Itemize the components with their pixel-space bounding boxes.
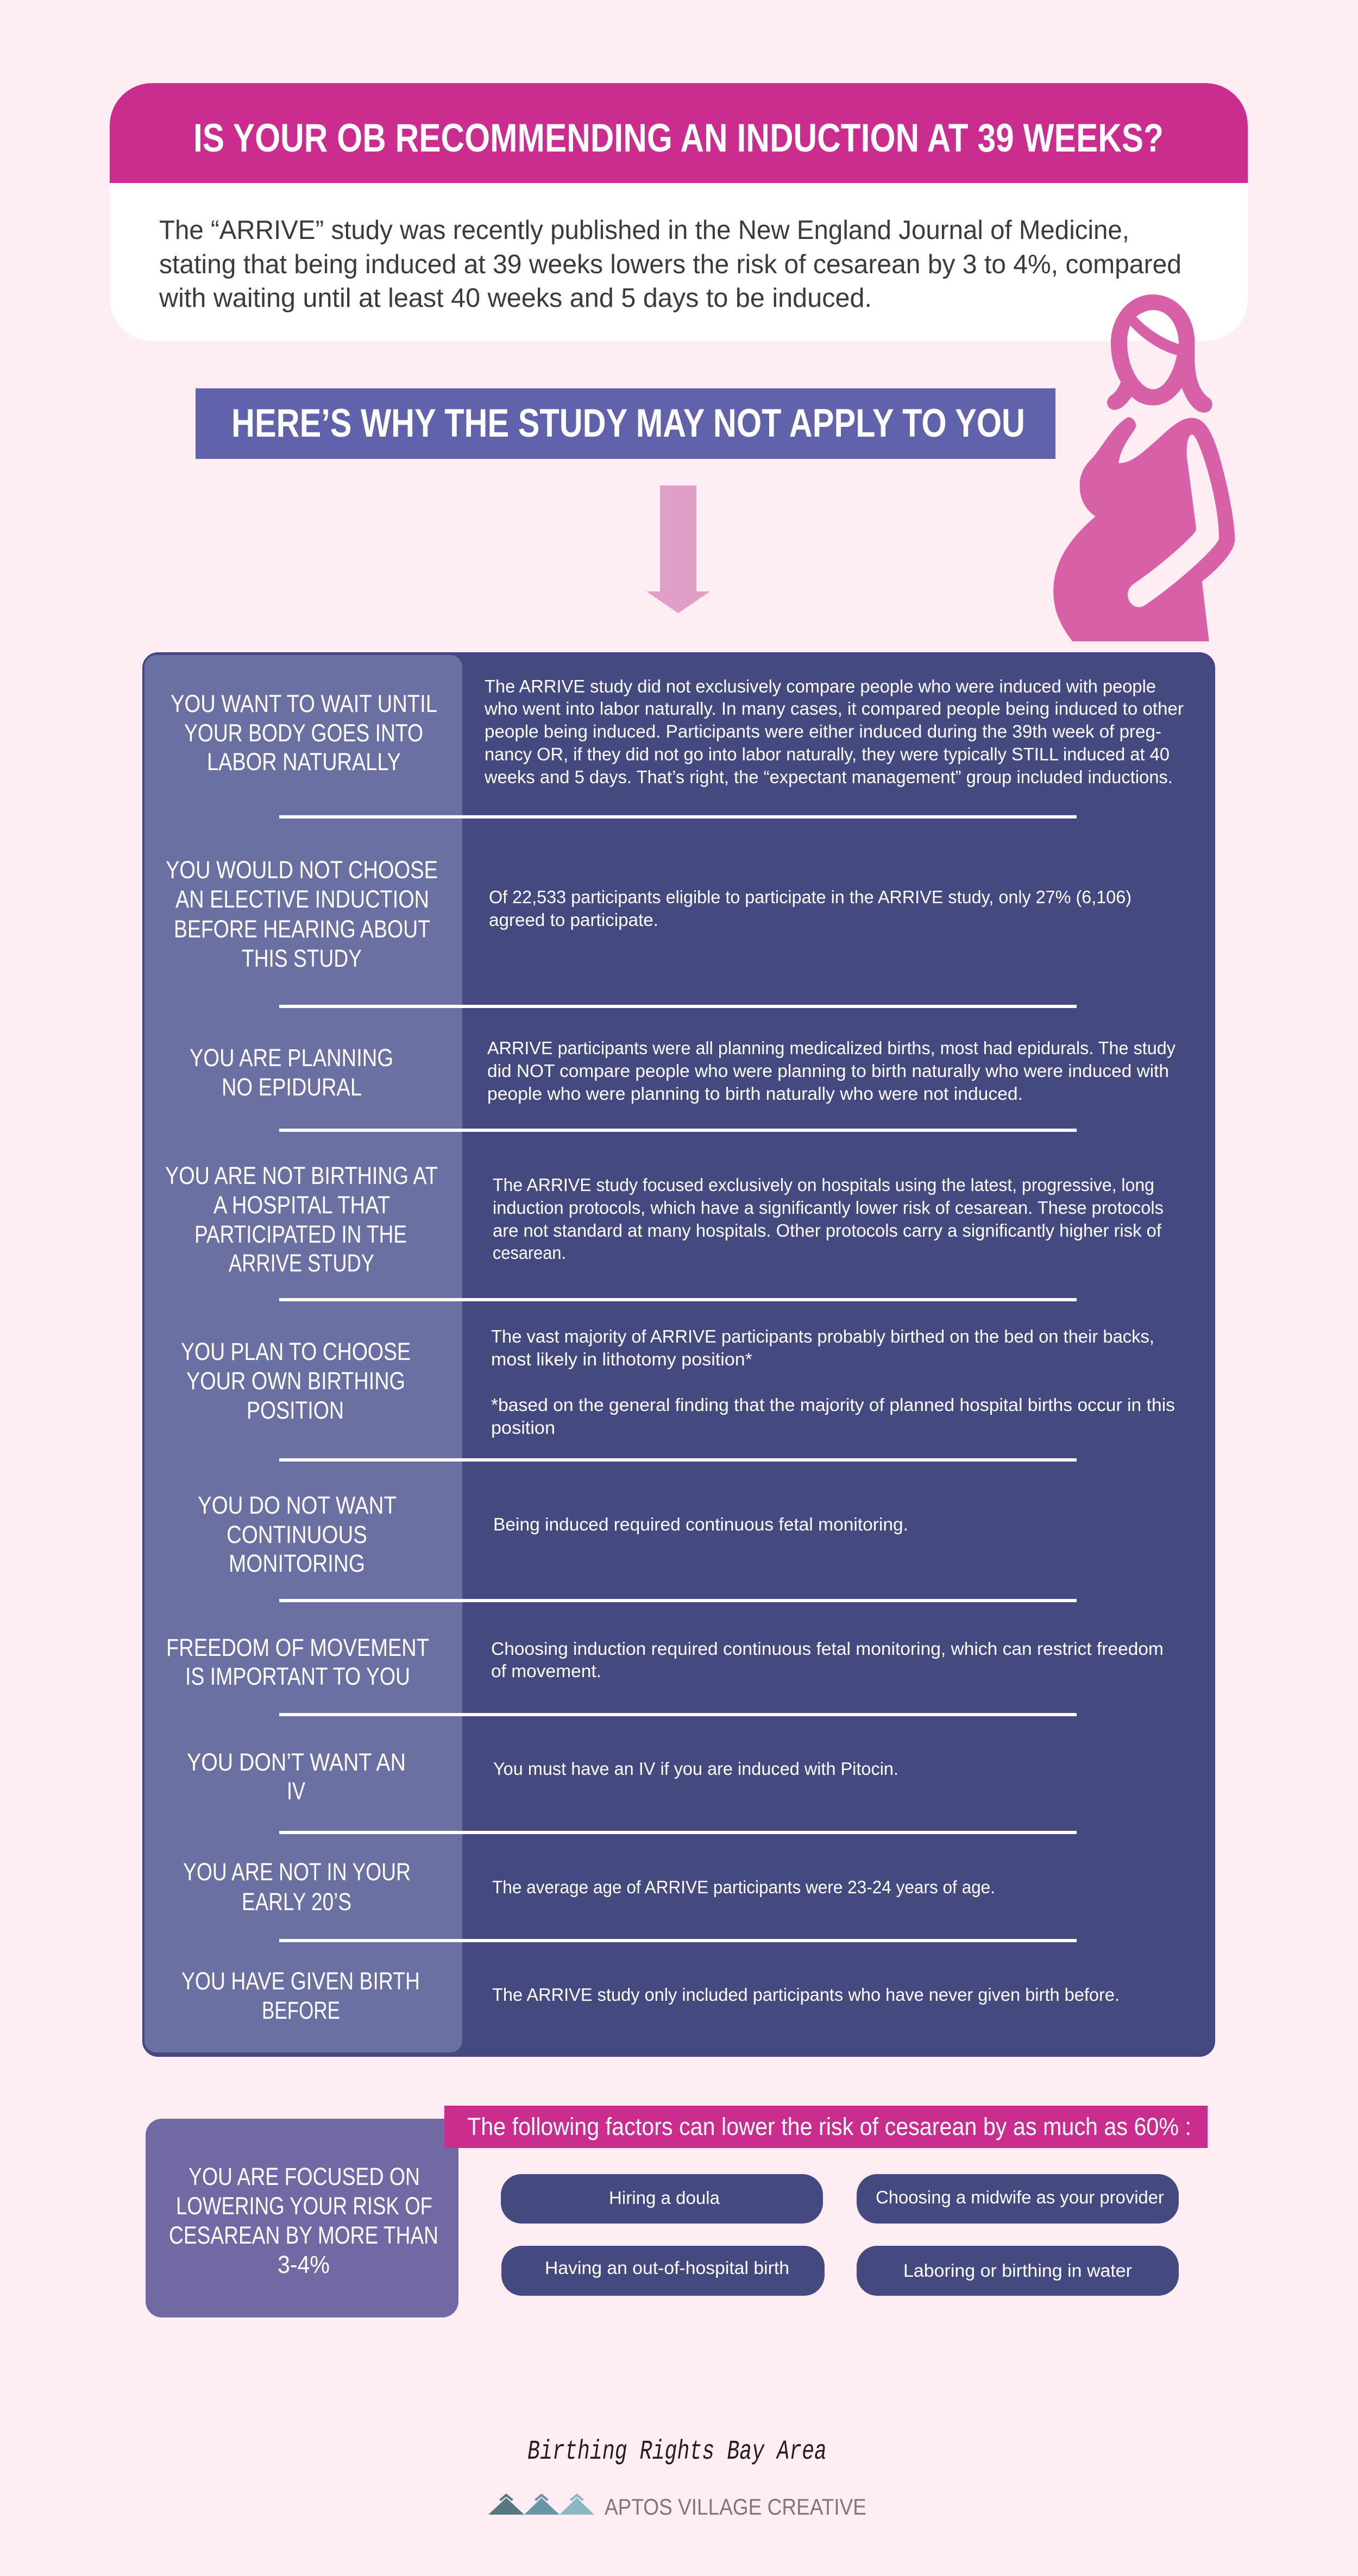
row label: IS IMPORTANT TO YOU	[185, 1662, 410, 1690]
panel: reasons table	[143, 653, 1215, 2056]
row text: most likely in lithotomy position*	[491, 1350, 752, 1370]
logo: Aptos Village Creative	[488, 2493, 866, 2520]
card background	[110, 83, 1248, 341]
pill: doula: Hiring a doula	[609, 2188, 720, 2208]
icon: pregnant woman	[1053, 294, 1235, 641]
pill: out-of-hospital birth: Having an out-of-hospital birth	[545, 2258, 789, 2278]
row text: You must have an IV if you are induced with Pitocin.	[493, 1759, 898, 1779]
row label: A HOSPITAL THAT	[213, 1191, 390, 1219]
row label	[165, 1162, 438, 1277]
row: participating hospital	[165, 1162, 1164, 1277]
row: no epidural	[190, 1038, 1175, 1104]
row text: nancy OR, if they did not go into labor naturally, they were typically STILL induced at 40	[485, 745, 1170, 765]
card: focused on lowering risk	[146, 2119, 458, 2317]
title band	[110, 83, 1248, 183]
card: focused on lowering risk: 3-4%	[278, 2251, 330, 2278]
icon: three trees	[488, 2493, 594, 2515]
row text: Choosing induction required continuous fetal monitoring, which can restrict freedom	[491, 1639, 1164, 1659]
row text: induction protocols, which have a significantly lower risk of cesarean. These protocols	[493, 1198, 1164, 1218]
row text: The average age of ARRIVE participants were 23-24 years of age.	[492, 1878, 995, 1898]
row label: YOU WOULD NOT CHOOSE	[166, 856, 438, 884]
row text	[489, 887, 1131, 930]
row text: are not standard at many hospitals. Other protocols carry a significantly higher risk of	[493, 1221, 1162, 1241]
row: continuous monitoring	[198, 1491, 908, 1577]
row: age	[183, 1858, 995, 1916]
row label: IV	[287, 1777, 305, 1805]
row label: YOUR OWN BIRTHING	[186, 1367, 405, 1395]
row text: position	[491, 1418, 555, 1438]
logo text: APTOS VILLAGE CREATIVE	[605, 2494, 866, 2520]
pill: water birth: Laboring or birthing in water	[903, 2260, 1132, 2281]
row text: Being induced required continuous fetal monitoring.	[493, 1515, 908, 1535]
row: wait for labor	[171, 677, 1184, 788]
row label: YOU ARE PLANNING	[190, 1044, 393, 1072]
row label: ARRIVE STUDY	[229, 1249, 374, 1277]
pill: midwife	[857, 2174, 1179, 2224]
row text	[484, 677, 1184, 788]
row text: The vast majority of ARRIVE participants probably birthed on the bed on their backs,	[491, 1327, 1154, 1347]
card: focused on lowering risk: YOU ARE FOCUSED ON	[188, 2163, 420, 2190]
banner: following factors: The following factors can lower the risk of cesarean by as much as 60% :	[467, 2113, 1191, 2140]
row: freedom of movement	[166, 1634, 1164, 1690]
title: IS YOUR OB RECOMMENDING AN INDUCTION AT 39 WEEKS?	[193, 116, 1164, 160]
row text: *based on the general finding that the majority of planned hospital births occur in this	[491, 1395, 1175, 1415]
row label	[181, 1967, 420, 2024]
pill: doula	[501, 2174, 823, 2224]
row label: BEFORE	[262, 1996, 340, 2024]
row label	[198, 1491, 397, 1577]
row: birthing position	[181, 1327, 1175, 1438]
intro text: The “ARRIVE” study was recently published in the New England Journal of Medicine,	[159, 216, 1129, 245]
row label	[166, 856, 438, 972]
row label: YOU ARE NOT BIRTHING AT	[165, 1162, 438, 1189]
card: focused on lowering risk: CESAREAN BY MORE THAN	[169, 2221, 438, 2249]
row label	[190, 1044, 393, 1101]
row text: The ARRIVE study focused exclusively on hospitals using the latest, progressive, long	[493, 1175, 1154, 1195]
row text: The ARRIVE study only included participants who have never given birth before.	[492, 1985, 1120, 2005]
row label: LABOR NATURALLY	[207, 748, 401, 776]
pill: midwife: Choosing a midwife as your provider	[876, 2187, 1164, 2207]
row: given birth before	[181, 1967, 1120, 2024]
row label: YOU WANT TO WAIT UNTIL	[171, 690, 437, 717]
row text	[487, 1038, 1175, 1104]
row label	[171, 690, 437, 776]
left column	[144, 655, 462, 2052]
row text: people being induced. Participants were either induced during the 39th week of preg-	[485, 722, 1161, 742]
row label: EARLY 20’S	[242, 1888, 351, 1916]
row text	[493, 1175, 1164, 1263]
row label: YOU ARE NOT IN YOUR	[183, 1858, 411, 1886]
row text: did NOT compare people who were planning to birth naturally who were induced with	[487, 1061, 1169, 1081]
row text: The ARRIVE study did not exclusively compare people who were induced with people	[485, 677, 1156, 697]
intro text: stating that being induced at 39 weeks lowers the risk of cesarean by 3 to 4%, compared	[159, 250, 1181, 279]
row: elective induction	[166, 856, 1131, 972]
row label: CONTINUOUS	[227, 1521, 367, 1548]
row text: who went into labor naturally. In many cases, it compared people being induced to other	[484, 699, 1184, 719]
row label	[183, 1858, 411, 1916]
row label: BEFORE HEARING ABOUT	[174, 915, 430, 943]
row text	[491, 1639, 1164, 1681]
row label: YOU HAVE GIVEN BIRTH	[181, 1967, 420, 1995]
heading: why the study may not apply	[196, 388, 1055, 459]
row label	[187, 1748, 406, 1805]
row label: YOU DON’T WANT AN	[187, 1748, 406, 1776]
panel: intro card	[110, 83, 1248, 341]
pill: out-of-hospital birth	[501, 2246, 825, 2296]
row label: YOU PLAN TO CHOOSE	[181, 1338, 411, 1365]
row text	[491, 1327, 1175, 1438]
row label: FREEDOM OF MOVEMENT	[166, 1634, 429, 1661]
row label: THIS STUDY	[242, 944, 362, 972]
row text: people who were planning to birth naturally who were not induced.	[487, 1084, 1023, 1104]
row text: weeks and 5 days. That’s right, the “expectant management” group included inductions.	[484, 767, 1173, 788]
row text: ARRIVE participants were all planning medicalized births, most had epidurals. The study	[487, 1038, 1175, 1059]
row label	[166, 1634, 429, 1690]
panel: lowering cesarean risk	[146, 2106, 1208, 2317]
row: no IV	[187, 1748, 898, 1805]
intro text: with waiting until at least 40 weeks and 5 days to be induced.	[159, 284, 872, 313]
credit: Birthing Rights Bay Area: Birthing Rights Bay Area	[527, 2436, 827, 2467]
row text: Of 22,533 participants eligible to participate in the ARRIVE study, only 27% (6,106)	[489, 887, 1131, 908]
card: focused on lowering risk: LOWERING YOUR RISK OF	[176, 2192, 432, 2220]
row label: PARTICIPATED IN THE	[194, 1220, 407, 1248]
row label	[181, 1338, 411, 1424]
panel background	[143, 653, 1215, 2056]
pill: water birth	[857, 2246, 1179, 2296]
row label: NO EPIDURAL	[222, 1073, 362, 1101]
row text: of movement.	[491, 1661, 601, 1681]
intro text	[159, 216, 1181, 313]
arrow: down	[646, 486, 710, 613]
row text: cesarean.	[493, 1243, 566, 1263]
row label: MONITORING	[229, 1550, 365, 1577]
row label: POSITION	[247, 1396, 344, 1424]
row label: YOUR BODY GOES INTO	[184, 719, 423, 747]
row label: AN ELECTIVE INDUCTION	[175, 885, 429, 913]
row label: YOU DO NOT WANT	[198, 1491, 397, 1519]
row text: agreed to participate.	[489, 910, 658, 930]
banner: following factors	[444, 2106, 1208, 2148]
heading: why the study may not apply: HERE’S WHY THE STUDY MAY NOT APPLY TO YOU	[231, 401, 1025, 445]
